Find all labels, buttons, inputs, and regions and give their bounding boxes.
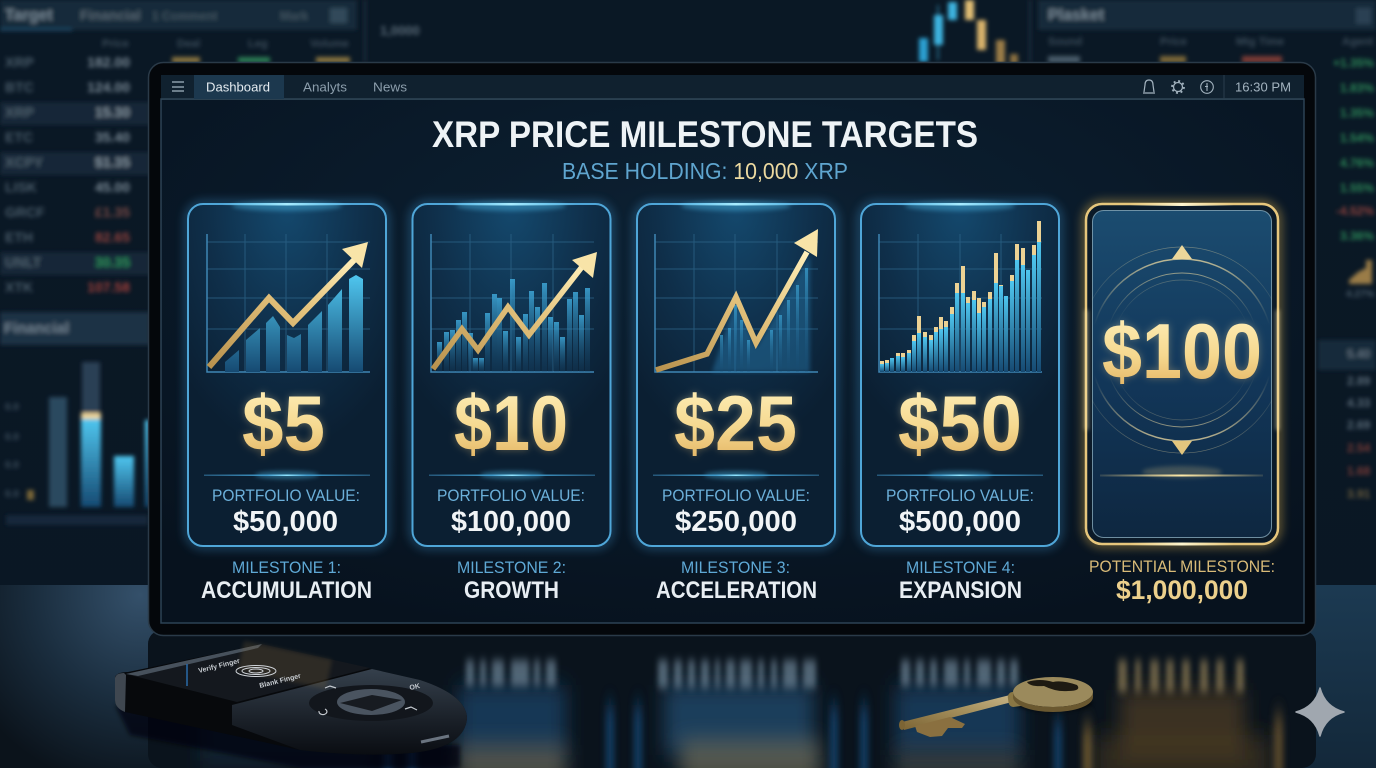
- blurred market table right: 2.89: [1347, 374, 1371, 388]
- icon: gear: [1172, 81, 1184, 93]
- milestone 1 caption: [201, 558, 372, 604]
- chart: growth bars and arrow: [207, 234, 370, 372]
- chart: denser bars and arrow: [431, 234, 597, 372]
- blurred market table left: Leg: [248, 38, 268, 50]
- panel: milestone 2: [412, 201, 610, 546]
- blurred market table left: 124.00: [87, 79, 130, 95]
- blurred market table right: 4.27%: [1346, 289, 1374, 300]
- potential milestone caption: $1,000,000: [1116, 575, 1248, 605]
- tab: news: News: [373, 80, 408, 94]
- blurred financial bar panel: Financial: [4, 320, 69, 337]
- panel: milestone 3: [637, 201, 835, 546]
- title: XRP PRICE MILESTONE TARGETS: [432, 114, 978, 155]
- blurred market table left: ETH: [5, 229, 33, 245]
- brass key: [899, 677, 1093, 737]
- blurred market table right: Agent: [1342, 36, 1374, 48]
- blurred market table left: XRP: [5, 104, 34, 120]
- panel: potential milestone: [1079, 203, 1285, 546]
- blurred market table left: Mark: [280, 9, 308, 23]
- blurred market table left: LISK: [5, 179, 37, 195]
- milestone 3 caption: ACCELERATION: [656, 577, 817, 604]
- blurred market table right: 3.91: [1347, 487, 1371, 501]
- milestone 4 caption: [899, 558, 1022, 604]
- milestone 2 caption: [457, 558, 566, 604]
- price: $100: $100: [1102, 307, 1262, 395]
- portfolio label: PORTFOLIO VALUE:: [437, 486, 585, 505]
- price: $10: $10: [454, 379, 568, 467]
- milestone 3 caption: MILESTONE 3:: [681, 558, 790, 577]
- device control dial: [309, 683, 433, 721]
- blurred market table left: GRCF: [5, 204, 45, 220]
- ring emblem: [1092, 245, 1272, 455]
- blurred market table left: Target: [5, 7, 53, 24]
- portfolio value: $500,000: [899, 506, 1021, 538]
- blurred market table left: Volume: [310, 38, 349, 50]
- blurred market table right: 1.35%: [1340, 106, 1374, 120]
- blurred financial bar panel: [0, 312, 150, 525]
- blurred market table left: 45.00: [95, 179, 130, 195]
- price: $5: $5: [242, 379, 325, 467]
- portfolio label: PORTFOLIO VALUE:: [212, 486, 360, 505]
- blurred market table left: 35.40: [95, 129, 130, 145]
- milestone 3 caption: [656, 558, 817, 604]
- subtitle: BASE HOLDING: 10,000 XRP: [562, 158, 848, 184]
- blurred market table left: UNLT: [5, 254, 42, 270]
- portfolio label: PORTFOLIO VALUE:: [886, 486, 1034, 505]
- milestone 4 caption: MILESTONE 4:: [906, 558, 1015, 577]
- blurred financial bar panel: 0.0: [5, 402, 19, 413]
- blurred market table left: Financial: [80, 7, 141, 23]
- hardware wallet device: [115, 641, 467, 768]
- blurred market table right: 2.69: [1347, 418, 1371, 432]
- tab: dashboard: [194, 75, 284, 99]
- icon: menu: [172, 82, 184, 91]
- tab: dashboard: Dashboard: [206, 80, 270, 94]
- milestone 1 caption: MILESTONE 1:: [232, 558, 341, 577]
- blurred market table right: 1.68: [1347, 464, 1371, 478]
- blurred market table left: BTC: [5, 79, 34, 95]
- blurred financial bar panel: 0.0: [5, 460, 19, 471]
- icon: up triangle: [1172, 245, 1192, 259]
- panel: milestone 1: [188, 201, 386, 546]
- blurred market table left: 82.65: [95, 229, 130, 245]
- blurred market table right: 3.36%: [1340, 229, 1374, 243]
- blurred market table right: +1.35%: [1333, 56, 1374, 70]
- blurred market table right: 4.76%: [1340, 156, 1374, 170]
- time: 16:30 PM: [1235, 80, 1291, 94]
- blurred market table right: Mtg Time: [1236, 36, 1284, 48]
- blurred market table right: 2.54: [1347, 441, 1371, 455]
- blurred financial bar panel: 0.0: [5, 432, 19, 443]
- blurred market table right: 1.55%: [1340, 181, 1374, 195]
- blurred market table left: Price: [102, 38, 129, 50]
- device screen text: Verify Finger: [198, 658, 241, 675]
- portfolio label: PORTFOLIO VALUE:: [662, 486, 810, 505]
- blurred market table right: [1038, 0, 1376, 501]
- blurred market table left: 182.00: [87, 54, 130, 70]
- navigation bar: [161, 75, 1304, 99]
- chart: gold-tipped bars: [879, 221, 1042, 372]
- blurred market table left: XRP: [5, 54, 34, 70]
- reflection streaks: card edges: [384, 705, 1283, 768]
- blurred market table left: 30.35: [95, 254, 130, 270]
- device screen text: [198, 658, 302, 690]
- blurred market table left: $1.35: [95, 154, 130, 170]
- blurred market table right: Price: [1160, 36, 1187, 48]
- blurred market table right: 5.40: [1347, 347, 1371, 361]
- blurred centre candlestick chart: [365, 0, 1030, 64]
- blurred market table right: 1.83%: [1340, 81, 1374, 95]
- blurred centre candlestick chart: 1,0000: [380, 23, 420, 38]
- milestone 2 caption: MILESTONE 2:: [457, 558, 566, 577]
- device screen text: Blank Finger: [259, 673, 302, 690]
- monitor screen: [161, 99, 1304, 623]
- portfolio value: $100,000: [451, 506, 571, 538]
- blurred market table right: Plasket: [1048, 7, 1105, 24]
- blurred market table left: XTK: [5, 279, 33, 295]
- portfolio value: $50,000: [233, 506, 338, 538]
- monitor bezel: [148, 62, 1316, 636]
- potential milestone caption: [1089, 557, 1275, 605]
- reflection glow: tan floor: [458, 740, 1020, 768]
- desk reflections: [148, 630, 1316, 768]
- icon: down triangle: [1172, 441, 1192, 455]
- blurred market table left: XCPY: [5, 154, 44, 170]
- reflection stripes: mirrored captions: [466, 660, 1244, 692]
- blurred market table right: 1.54%: [1340, 131, 1374, 145]
- milestone 4 caption: EXPANSION: [899, 577, 1022, 604]
- blurred market table right: 4.33: [1347, 396, 1371, 410]
- icon: clock: [1201, 81, 1213, 93]
- portfolio value: $250,000: [675, 506, 797, 538]
- price: $50: $50: [898, 379, 1022, 467]
- icon: bell: [1143, 80, 1155, 93]
- watermark sparkle: [1296, 688, 1344, 736]
- blurred market table left: 107.58: [87, 279, 130, 295]
- milestone 1 caption: ACCUMULATION: [201, 577, 372, 604]
- icon: fingerprint: [236, 666, 276, 676]
- tab: analysts: Analyts: [303, 80, 348, 94]
- reflection glow: blue bodies: [200, 685, 1270, 768]
- blurred market table left: ETC: [5, 129, 33, 145]
- panel: milestone 4: [861, 201, 1059, 546]
- blurred market table left: £1.35: [95, 204, 130, 220]
- blurred market table right: -4.52%: [1336, 204, 1374, 218]
- device control dial: OK: [409, 683, 421, 692]
- blurred market table left: [0, 0, 357, 295]
- potential milestone caption: POTENTIAL MILESTONE:: [1089, 557, 1275, 576]
- blurred market table left: 1 Comment: [152, 9, 217, 23]
- blurred market table left: 15.30: [95, 104, 130, 120]
- milestone 2 caption: GROWTH: [464, 577, 559, 604]
- price: $25: $25: [674, 379, 797, 467]
- chart: steep arrow with faint bars: [655, 229, 818, 372]
- blurred market table right: Sound: [1048, 36, 1082, 48]
- blurred market table left: Deal: [177, 38, 200, 50]
- desk surface: [0, 585, 1376, 768]
- blurred financial bar panel: 0.0: [5, 489, 19, 500]
